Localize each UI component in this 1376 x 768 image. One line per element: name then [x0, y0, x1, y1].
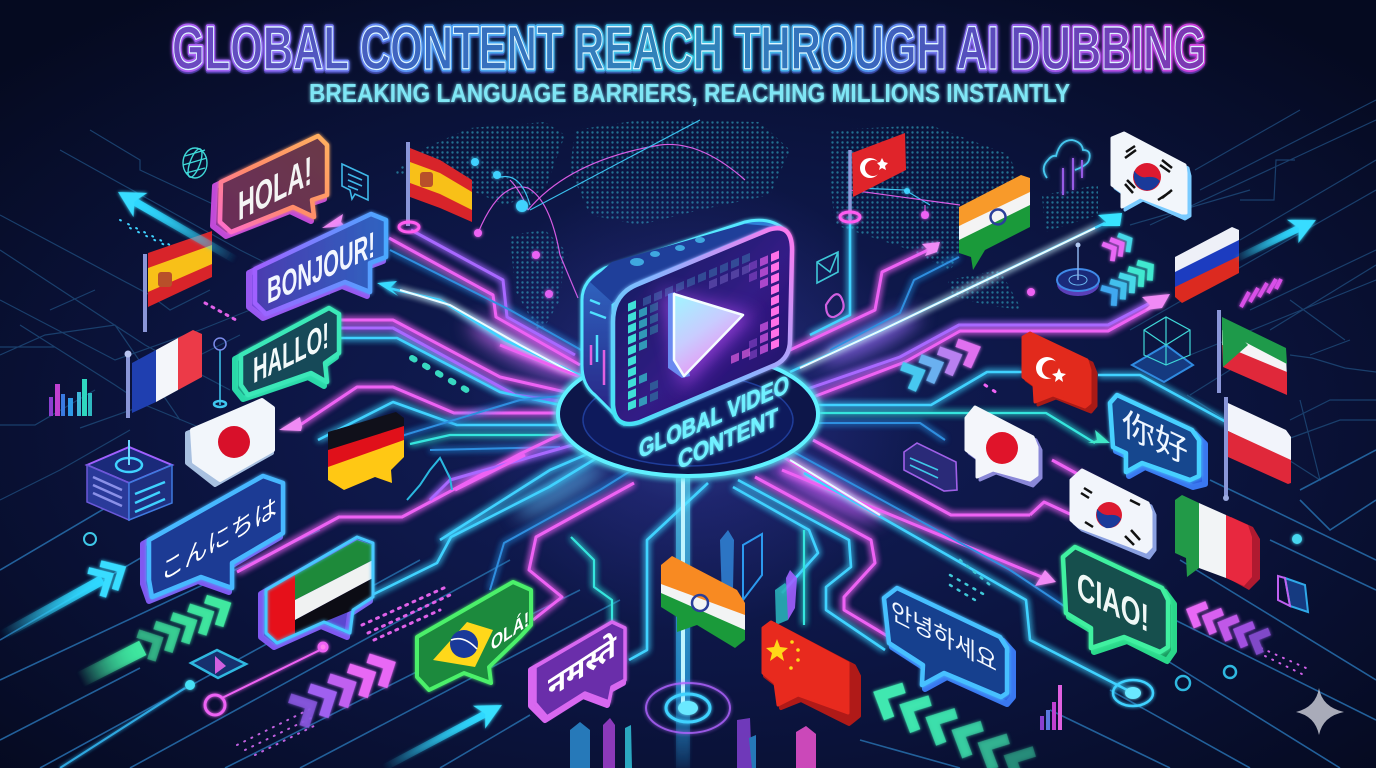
bubble: India top — [959, 175, 1030, 270]
arrow heads upper left — [279, 214, 398, 431]
bubble: Hallo: HALLO! — [253, 315, 329, 392]
icon: small square right — [1278, 576, 1308, 612]
bubble: India bottom — [661, 556, 745, 648]
bubble: Konnichiwa — [143, 476, 283, 601]
node: bottom right hub — [1113, 680, 1153, 706]
bubble: Nihao: 你好 — [1122, 404, 1188, 472]
bubble: Namaste — [531, 622, 625, 720]
bubble: Konnichiwa: こんにちは — [161, 492, 277, 587]
chevrons: upper right teal — [1101, 257, 1157, 306]
node: rings right — [1176, 666, 1236, 690]
bubble: Brazil — [417, 582, 531, 690]
bubble: Hola: HOLA! — [238, 148, 312, 230]
bubble: Germany — [328, 412, 404, 490]
flag: pole flag red white green — [1219, 310, 1287, 395]
subtitle: BREAKING LANGUAGE BARRIERS, REACHING MILLIONS INSTANTLY — [309, 78, 1070, 108]
bubble: Hallo — [235, 308, 339, 399]
slashes: pink upper right — [1241, 279, 1281, 307]
icon: envelope — [817, 252, 838, 283]
flag: France — [124, 330, 202, 418]
bubble: Hola — [213, 136, 327, 236]
icon: pin base — [1057, 242, 1099, 296]
flag: Poland — [1223, 397, 1291, 501]
bubble: Korea right — [1071, 470, 1155, 558]
side panel bars — [590, 300, 606, 385]
icon: chat loop — [826, 294, 844, 317]
icon: diamond play — [191, 650, 246, 678]
screen — [613, 228, 792, 424]
world map dots — [392, 120, 1098, 335]
arrow: pink chevrons — [290, 651, 397, 727]
bubble: China — [763, 622, 859, 724]
watermark sparkle — [1296, 688, 1344, 735]
arrow: cyan lower center — [378, 694, 508, 768]
bubble: Bonjour — [249, 214, 386, 318]
node: cyan dot — [60, 680, 195, 768]
arrow: cyan upper right — [1229, 208, 1322, 271]
map route arcs — [478, 120, 960, 298]
bubble: Annyeonghaseyo — [884, 588, 1013, 704]
dot clusters — [120, 220, 1306, 755]
flag: Spain top — [399, 142, 472, 232]
central base ripple — [646, 683, 730, 733]
video device — [582, 220, 792, 425]
bubble: Japan flag left — [187, 400, 273, 485]
vertical beam — [676, 470, 690, 768]
flag: Spain left — [145, 231, 212, 332]
pixel mosaic — [632, 241, 775, 412]
bubble: Namaste: नमस्ते — [548, 626, 616, 706]
map nodes — [471, 158, 1035, 298]
bubble: Bonjour: BONJOUR! — [267, 224, 375, 312]
flag: Russia — [1175, 227, 1239, 303]
bubble: Nihao — [1110, 395, 1205, 487]
icon: bar chart left — [49, 379, 92, 416]
device top icons — [630, 237, 705, 266]
bubble: Ciao: CIAO! — [1077, 563, 1149, 641]
bubble: Italy — [1175, 495, 1260, 590]
play glow — [660, 290, 755, 390]
bottom center tower bars — [570, 530, 816, 768]
circuit lines: upper right — [760, 218, 1228, 500]
bubble: Turkey — [1023, 333, 1096, 412]
icon: hologram cube — [1132, 317, 1193, 382]
pedestal — [558, 352, 818, 476]
circuit lines: upper left — [300, 230, 600, 450]
node: ring pink — [205, 643, 327, 715]
icon: mountain chart — [407, 458, 452, 500]
arrow: green chevrons — [74, 592, 232, 693]
device side and top — [582, 220, 785, 425]
node: dot right — [1292, 534, 1302, 544]
background circuit lines right — [860, 100, 1376, 768]
icon: antenna pin — [214, 338, 226, 407]
bubble: Korea top — [1112, 133, 1190, 219]
icon: cloud — [1044, 140, 1090, 195]
bubble: Annyeonghaseyo: 안녕하세요 — [891, 597, 997, 678]
icon: chat — [342, 164, 368, 200]
circuit lines: lower right — [733, 440, 1133, 693]
label line two: CONTENT — [678, 402, 778, 475]
chevrons: green row bottom — [873, 680, 1034, 768]
icon: small server right — [904, 443, 957, 491]
arrow: cyan lower left — [0, 556, 129, 649]
light streak glows — [463, 304, 925, 531]
arrow heads upper right — [922, 213, 1170, 586]
main content block — [558, 220, 818, 476]
bubble: Brazil: OLÁ! — [491, 607, 529, 656]
arrow: cyan upper left — [111, 180, 243, 272]
bubble: UAE — [261, 537, 373, 647]
pedestal label — [639, 369, 789, 475]
icon: bar chart bottom right — [1040, 685, 1062, 730]
chevrons: upper right pink — [1102, 231, 1135, 261]
circuit lines: lower left — [237, 395, 708, 660]
icon: globe — [183, 147, 207, 179]
server cube — [87, 440, 172, 520]
center glow — [458, 170, 918, 630]
label line one: GLOBAL VIDEO — [639, 369, 789, 464]
icon: ring target left — [84, 533, 96, 545]
bubble: Japan flag right — [966, 407, 1041, 486]
play button — [668, 292, 743, 378]
device top details — [590, 224, 770, 302]
chevrons: blue to pink center right — [902, 337, 980, 390]
background circuit lines left — [0, 130, 620, 768]
flag: Turkey top — [840, 133, 906, 222]
bubble: Ciao — [1063, 547, 1174, 661]
chevrons: pink row right — [1186, 600, 1269, 654]
